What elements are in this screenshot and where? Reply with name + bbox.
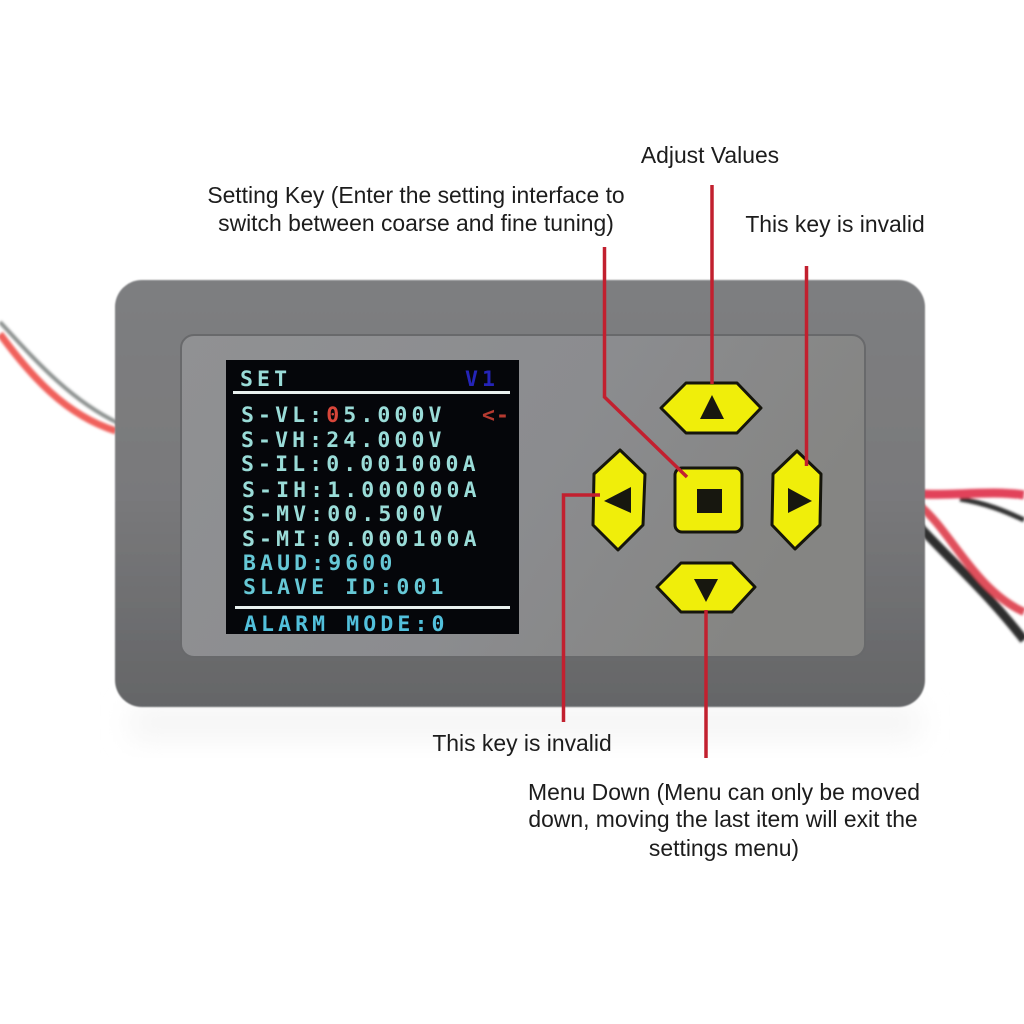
inner panel (181, 335, 865, 657)
button: down (657, 563, 755, 612)
label: menu down: Menu Down (Menu can only be moved (528, 779, 920, 805)
settings rows: BAUD:9600 (243, 551, 396, 576)
right wires (918, 493, 1024, 640)
button: set (675, 468, 742, 532)
button: right (772, 451, 821, 549)
label: adjust values: Adjust Values (641, 142, 779, 168)
settings rows: SLAVE ID:001 (243, 575, 448, 600)
label: menu down: settings menu) (649, 835, 799, 861)
button: up (661, 383, 761, 433)
settings rows: S-VL:05.000V (241, 403, 446, 428)
settings rows (241, 403, 510, 600)
arrow: adjust values leader (710, 185, 714, 384)
outer bezel (115, 280, 925, 707)
alarm mode row: ALARM MODE:0 (244, 612, 449, 637)
settings rows: S-IL:0.001000A (241, 452, 480, 477)
arrow: left key leader (564, 495, 600, 722)
version label: V1 (465, 367, 499, 392)
button: left (593, 450, 645, 550)
settings rows: <- (482, 403, 510, 428)
LCD screen (226, 360, 519, 637)
arrow: setting key leader (604, 247, 687, 477)
arrow: menu down leader (704, 610, 708, 758)
left wires (0, 322, 118, 431)
label: right key invalid: This key is invalid (745, 211, 925, 237)
label: setting key: switch between coarse and fine tuning) (218, 210, 614, 236)
settings rows: S-VH:24.000V (241, 428, 446, 453)
settings rows: S-MI:0.000100A (242, 527, 481, 552)
settings rows: S-MV:00.500V (242, 502, 447, 527)
device housing (115, 280, 925, 707)
label: menu down: down, moving the last item will exit the (528, 806, 918, 832)
settings rows: S-IH:1.000000A (242, 478, 481, 503)
screen header: SET (240, 367, 291, 392)
arrow: right key leader (805, 266, 808, 466)
device shadow (130, 705, 920, 740)
label: setting key: Setting Key (Enter the setting interface to (207, 182, 625, 208)
label: left key invalid: This key is invalid (432, 730, 612, 756)
